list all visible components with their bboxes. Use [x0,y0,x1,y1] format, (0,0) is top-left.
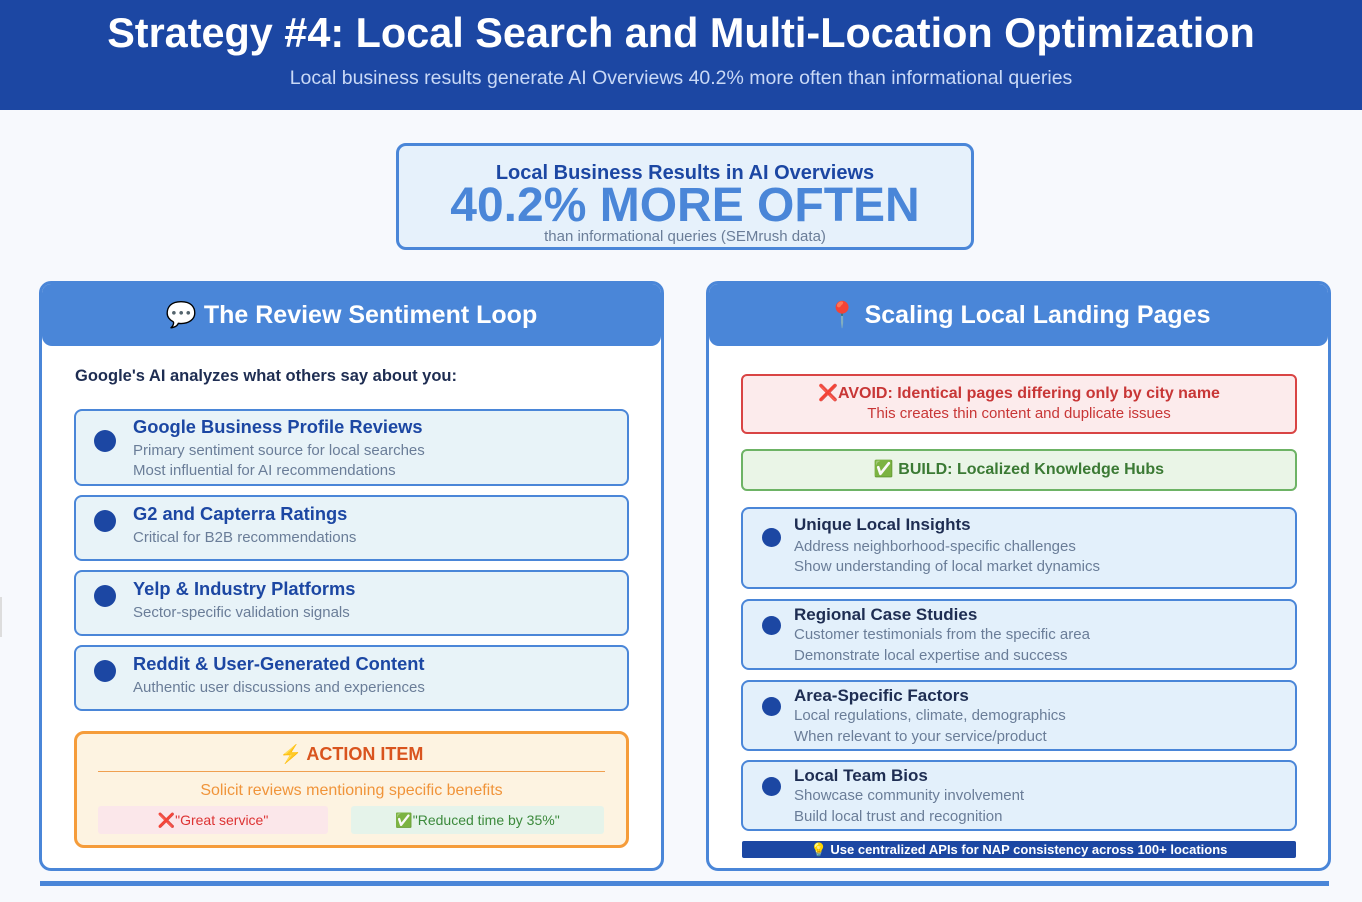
card: local team bios: Showcase community involvement [794,787,1024,804]
card: Yelp: Sector-specific validation signals [133,604,350,621]
action item: ⚡ ACTION ITEM [280,744,423,764]
card: local team bios: Local Team Bios [794,766,928,785]
action item [74,731,629,848]
card: Google Business Profile: Primary sentiment source for local searches [133,442,425,459]
good example: ✅"Reduced time by 35%" [395,812,560,828]
card: regional case studies: Regional Case Studies [794,605,977,624]
panel header [709,284,1328,346]
card: G2 and Capterra [74,495,629,561]
card: G2 and Capterra: G2 and Capterra Ratings [133,503,347,524]
card: area-specific factors: Local regulations, climate, demographics [794,707,1066,724]
subtitle: Local business results generate AI Overviews 40.2% more often than informational queries [290,67,1072,89]
stat callout [396,143,974,250]
avoid box: ❌AVOID: Identical pages differing only by city name [818,385,1220,402]
card: Google Business Profile: Most influential for AI recommendations [133,462,396,479]
card: local team bios [741,760,1297,831]
side tab [0,597,2,637]
card: unique local insights: Unique Local Insights [794,515,971,534]
build box [741,449,1297,491]
tip banner [742,841,1296,858]
header [0,0,1362,110]
card: Reddit: Reddit & User-Generated Content [133,653,425,674]
card: Yelp [74,570,629,636]
card: regional case studies: Demonstrate local expertise and success [794,647,1067,664]
card: regional case studies: Customer testimonials from the specific area [794,626,1090,643]
stat callout: Local Business Results in AI Overviews [496,162,874,184]
stat callout: 40.2% MORE OFTEN [450,179,920,232]
card: unique local insights: Address neighborhood-specific challenges [794,538,1076,555]
panel header: 📍 Scaling Local Landing Pages [826,301,1210,329]
panel: scaling local landing pages [706,281,1331,871]
tip banner: 💡 Use centralized APIs for NAP consistency across 100+ locations [811,842,1227,857]
card: area-specific factors: Area-Specific Factors [794,686,969,705]
card: Google Business Profile: Google Business Profile Reviews [133,416,423,437]
card: G2 and Capterra: Critical for B2B recommendations [133,529,356,546]
card: unique local insights [741,507,1297,589]
panel: review sentiment loop [39,281,664,871]
stat callout: than informational queries (SEMrush data) [544,228,826,245]
action item: Solicit reviews mentioning specific benefits [200,782,503,799]
card: local team bios: Build local trust and recognition [794,808,1002,825]
card: regional case studies [741,599,1297,670]
card: Google Business Profile [74,409,629,486]
panel header: 💬 The Review Sentiment Loop [166,301,537,329]
card: area-specific factors [741,680,1297,751]
panel header [42,284,661,346]
avoid box [741,374,1297,434]
title: Strategy #4: Local Search and Multi-Location Optimization [107,10,1255,56]
bad example: ❌"Great service" [158,812,268,828]
good example [351,806,604,834]
build box: ✅ BUILD: Localized Knowledge Hubs [874,461,1164,478]
card: area-specific factors: When relevant to your service/product [794,728,1047,745]
avoid box: This creates thin content and duplicate issues [867,405,1171,422]
card: Reddit: Authentic user discussions and experiences [133,679,425,696]
card: Reddit [74,645,629,711]
bad example [98,806,328,834]
card: Yelp: Yelp & Industry Platforms [133,578,355,599]
intro text: Google's AI analyzes what others say about you: [75,367,457,385]
card: unique local insights: Show understanding of local market dynamics [794,558,1100,575]
